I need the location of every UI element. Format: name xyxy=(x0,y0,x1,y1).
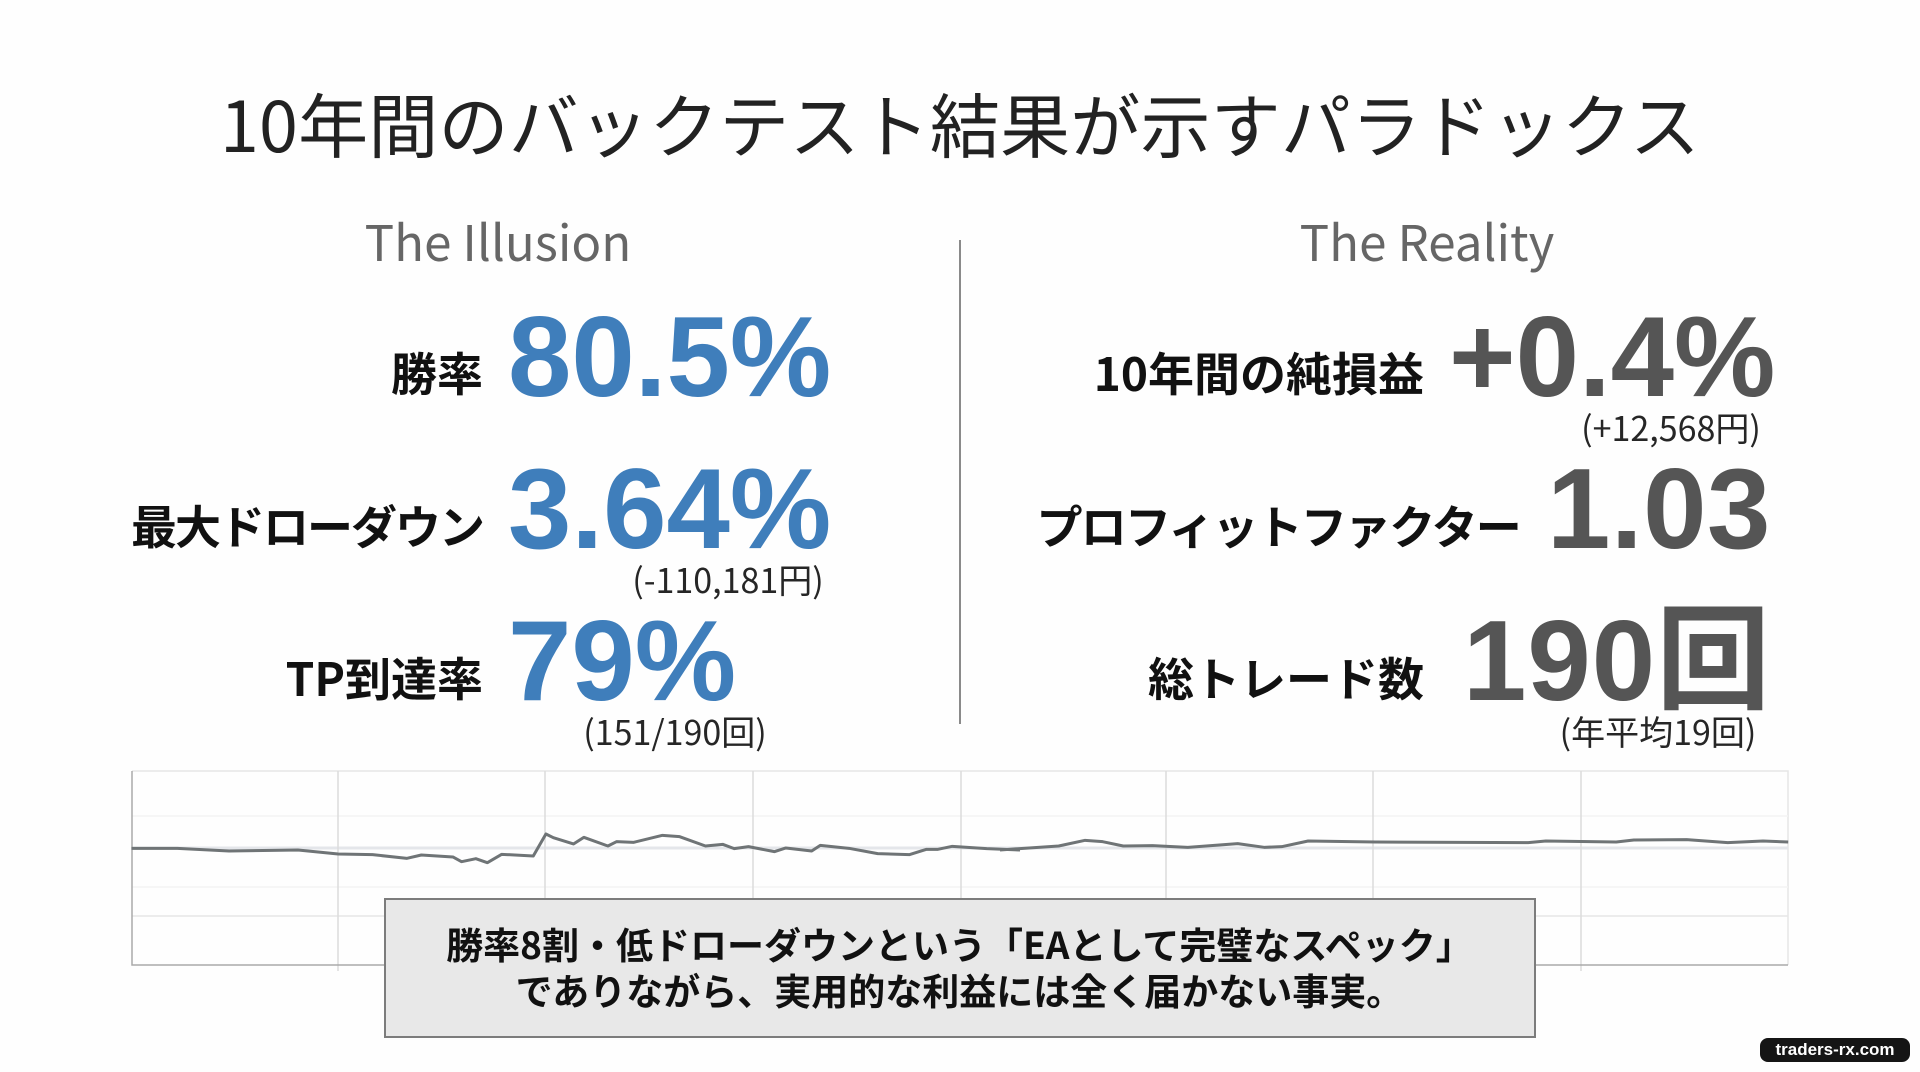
label: win rate: 勝率 xyxy=(391,339,483,405)
value: profit factor: 1.03 xyxy=(1547,446,1771,573)
watermark badge xyxy=(1760,1038,1910,1062)
divider xyxy=(959,240,961,724)
label: total trades: 総トレード数 xyxy=(1148,644,1424,710)
callout text: 勝率8割・低ドローダウンという「EAとして完璧なスペック」 xyxy=(446,916,1473,970)
label: profit factor: プロフィットファクター xyxy=(1037,492,1520,558)
note: drawdown amount: (-110,181円) xyxy=(632,554,824,603)
note: trades per year: (年平均19回) xyxy=(1560,706,1756,755)
note: TP count: (151/190回) xyxy=(583,706,767,755)
label: net profit: 10年間の純損益 xyxy=(1094,339,1424,405)
watermark badge: traders-rx.com xyxy=(1775,1040,1895,1059)
callout text: でありながら、実用的な利益には全く届かない事実。 xyxy=(516,962,1403,1016)
note: net profit amount: (+12,568円) xyxy=(1581,402,1761,451)
value: total trades: 190回 xyxy=(1463,598,1771,725)
label: max drawdown: 最大ドローダウン xyxy=(131,492,483,558)
value: win rate: 80.5% xyxy=(508,294,831,421)
value: max drawdown: 3.64% xyxy=(508,446,831,573)
value: net profit: +0.4% xyxy=(1449,294,1775,421)
heading: The Reality: The Reality xyxy=(1300,205,1554,276)
callout text xyxy=(446,916,1473,1016)
title: 10年間のバックテスト結果が示すパラドックス xyxy=(220,72,1700,173)
value: TP rate: 79% xyxy=(508,598,736,725)
heading: The Illusion: The Illusion xyxy=(365,205,631,276)
label: TP rate: TP到達率 xyxy=(286,644,483,710)
callout box xyxy=(384,898,1536,1038)
